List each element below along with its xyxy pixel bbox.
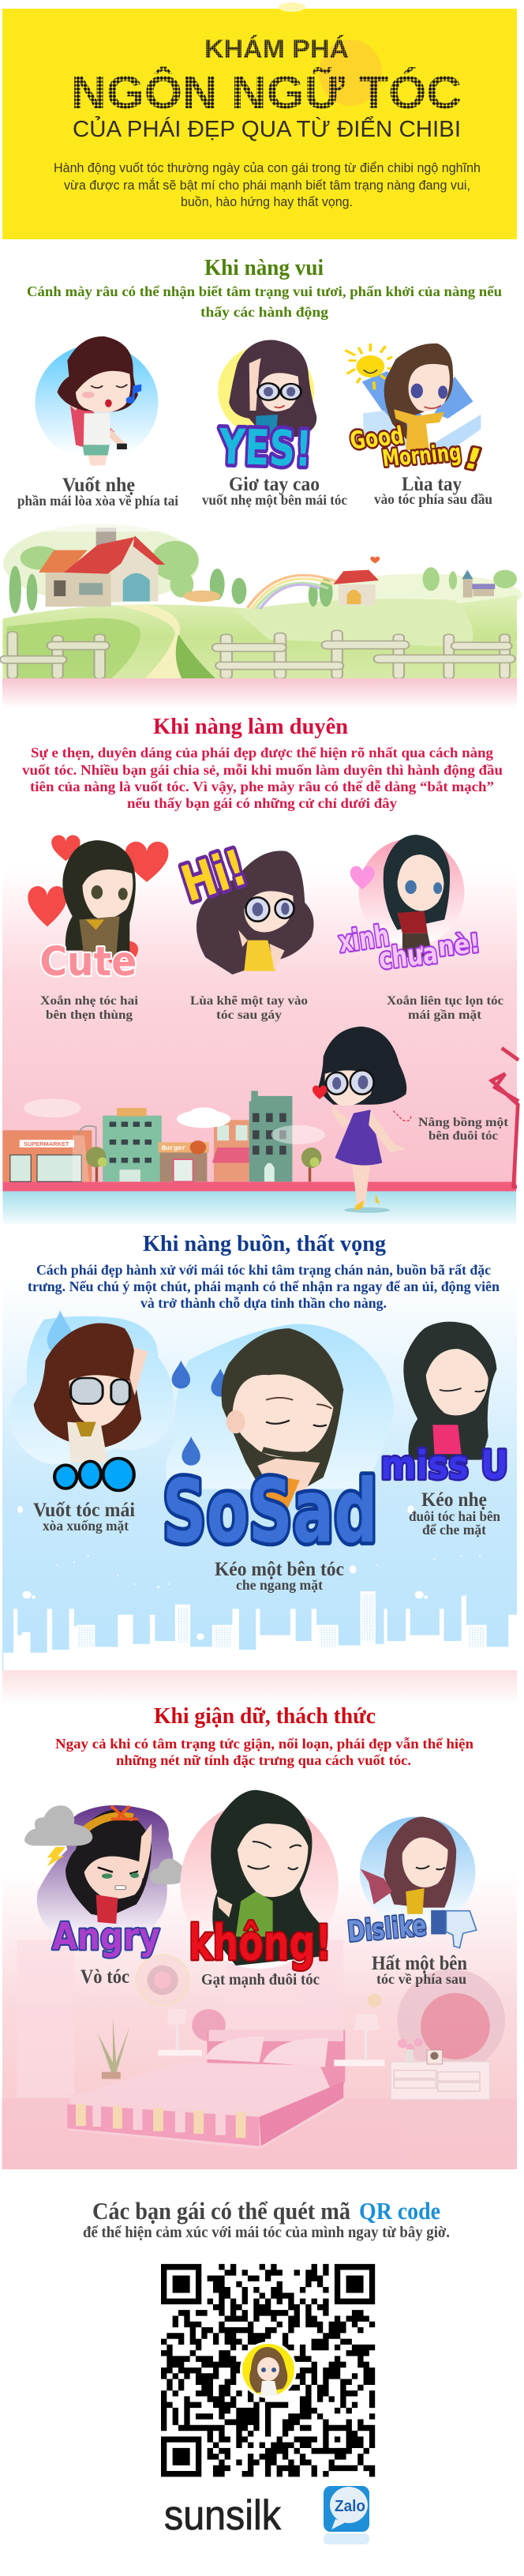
sticker: xinh chua ne: chưa [377, 936, 440, 976]
panel: qr footer [83, 2197, 450, 2544]
caption: lua tay: Lùa tay [402, 474, 462, 495]
character: dislike [346, 1817, 477, 1948]
captions: nang bong [418, 1116, 509, 1143]
caption: keo nhe [409, 1489, 500, 1538]
sticker: so sad: SoSad [163, 1461, 378, 1563]
character: lua tay [345, 344, 486, 477]
caption: vuot nhe: phần mái lòa xòa về phía tai [17, 493, 178, 509]
heading: khi nang buon: Khi nàng buồn, thất vọng [143, 1231, 386, 1256]
sticker: dots [54, 1459, 134, 1490]
intro text: khi gian du: những nét nữ tính đặc trưng qua cách vuốt tóc. [116, 1752, 411, 1768]
logo: zalo [324, 2486, 369, 2544]
caption: keo nhe: đuôi tóc hai bên [409, 1508, 500, 1524]
caption: vuot toc mai [33, 1500, 135, 1534]
captions: xinh: mái gần mặt [408, 1008, 482, 1022]
title: ngon ngu toc: NGÔN NGỮ TÓC [71, 67, 462, 118]
heading: khi nang vui: Khi nàng vui [204, 255, 324, 280]
intro text: khi nang vui [27, 284, 502, 320]
heading: khi gian du: Khi giận dữ, thách thức [154, 1703, 376, 1729]
sticker: xinh chua ne: nè! [436, 928, 481, 963]
subtitle: CỦA PHÁI ĐẸP QUA TỪ ĐIỂN CHIBI [73, 115, 461, 142]
illustration: city street: Burger [162, 1144, 186, 1152]
intro text: khi nang lam duyen [22, 745, 503, 811]
icon: thumbs down [431, 1910, 477, 1948]
caption: gio tay cao [202, 474, 347, 508]
captions: cute: bên thẹn thùng [46, 1008, 133, 1022]
character: keo nhe [380, 1322, 508, 1489]
character: nang bong [313, 1027, 411, 1213]
panel: khi nang lam duyen [2, 678, 518, 1229]
caption: keo mot ben toc: Kéo một bên tóc [215, 1559, 344, 1580]
caption: keo nhe: Kéo nhẹ [421, 1489, 487, 1511]
intro text: khi gian du: Ngay cả khi có tâm trạng tức giận, nổi loạn, phái đẹp vẫn thể hiện [55, 1736, 473, 1752]
caption: vuot toc mai: xòa xuống mặt [43, 1518, 129, 1534]
sticker: good morning: Good [348, 422, 406, 455]
caption: hat mot ben [372, 1953, 467, 1987]
captions: nang bong: Nâng bồng một [418, 1116, 509, 1129]
panel: yellow header [2, 2, 517, 239]
subheading: scan qr: để thể hiện cảm xúc với mái tóc của mình ngay từ bây giờ. [83, 2224, 450, 2241]
captions: cute [40, 994, 139, 1022]
sticker: good morning: ! [459, 441, 486, 477]
character: keo mot ben toc [163, 1328, 378, 1563]
illustration: city street: SUPERMARKET [24, 1142, 69, 1147]
captions: cute: Xoắn nhẹ tóc hai [40, 994, 139, 1008]
sticker: cute: Cute [39, 937, 137, 985]
caption: keo mot ben toc: che ngang mặt [236, 1577, 323, 1593]
caption: hat mot ben: tóc về phía sau [376, 1971, 466, 1987]
icon: qr avatar [240, 2341, 297, 2398]
character: vuot toc mai [34, 1310, 148, 1490]
caption: vuot nhe [17, 475, 178, 509]
intro paragraph: Hành động vuốt tóc thường ngày của con gái trong từ điển chibi ngộ nghĩnh [54, 161, 481, 175]
panel: khi nang vui [0, 255, 524, 678]
sticker: yes: YES! [217, 418, 313, 478]
caption: gat manh duoi toc: Gạt mạnh đuôi tóc [201, 1971, 320, 1988]
sticker: good morning [348, 422, 486, 477]
caption: vuot toc mai: Vuốt tóc mái [33, 1500, 135, 1521]
illustration: countryside landscape [0, 516, 524, 678]
sticker: xinh chua ne [337, 918, 481, 976]
character: angry [24, 1805, 187, 1958]
background clouds [9, 1316, 394, 1489]
sticker: khong: không! [189, 1915, 331, 1971]
character: hi [174, 838, 314, 974]
logo: zalo: Zalo [335, 2498, 365, 2515]
qr code [161, 2267, 375, 2474]
heading: khi nang lam duyen: Khi nàng làm duyên [153, 714, 348, 739]
illustration: white city skyline [3, 1505, 517, 1670]
intro text: khi nang lam duyen: vuốt tóc. Nhiều bạn gái chia sẻ, mỗi khi muốn làm duyên thì hành động đầu [22, 762, 503, 778]
intro text: khi nang vui: thấy các hành động [200, 304, 328, 320]
intro paragraph [54, 161, 481, 209]
logo: sunsilk: sunsilk [164, 2492, 281, 2539]
caption: hat mot ben: Hất một bên [372, 1953, 467, 1974]
sticker: angry: Angry [52, 1916, 160, 1958]
intro text: khi gian du [55, 1736, 473, 1768]
caption: gio tay cao: Giơ tay cao [229, 474, 320, 495]
captions: hi [190, 994, 308, 1022]
intro text: khi nang vui: Cánh mày râu có thể nhận biết tâm trạng vui tươi, phấn khởi của nàng nếu [27, 284, 502, 299]
intro text: khi nang lam duyen: nếu thấy bạn gái có những cử chỉ dưới đây [127, 795, 397, 811]
arrow: hair [393, 1111, 411, 1121]
character: vuot nhe [35, 336, 159, 465]
character: cute [28, 836, 168, 985]
panel: khi gian du [2, 1670, 517, 2169]
caption: lua tay: vào tóc phía sau đầu [374, 491, 492, 507]
intro text: khi nang buon: trưng. Nếu chú ý một chút, phái mạnh có thể nhận ra ngay để an ủi, động viên [28, 1279, 500, 1294]
sticker: hi: Hi! [174, 838, 253, 914]
character: xinh chua ne [337, 835, 481, 976]
heading: scan qr: QR code [359, 2197, 440, 2225]
intro text: khi nang buon: và trở thành chỗ dựa tinh thần cho nàng. [140, 1295, 387, 1311]
sticker: xinh chua ne: xinh [337, 918, 391, 959]
caption: lua tay [374, 474, 492, 507]
captions: hi: tóc sau gáy [216, 1008, 282, 1022]
intro text: khi nang lam duyen: tiên của nàng là vuốt tóc. Vì vậy, phe mày râu có thể dễ dàng “bắt mạch” [30, 779, 494, 794]
captions: xinh: Xoắn liên tục lọn tóc [387, 994, 503, 1008]
intro paragraph: buồn, hào hứng hay thất vọng. [181, 195, 353, 209]
panel: khi nang buon [2, 1224, 517, 1670]
illustration: pink bedroom [2, 1940, 517, 2169]
intro paragraph: vừa được ra mắt sẽ bật mí cho phái mạnh biết tâm trạng nàng đang vui, [64, 178, 470, 193]
sticker: good morning: Morning [380, 439, 463, 472]
intro text: khi nang buon: Cách phái đẹp hành xử với mái tóc khi tâm trạng chán nản, buồn bã rất đặc [36, 1262, 491, 1278]
illustration: city street [2, 1048, 518, 1229]
title: kham pha: KHÁM PHÁ [204, 35, 349, 63]
caption: vo toc: Vò tóc [80, 1966, 129, 1988]
character: khong [180, 1790, 339, 1971]
caption: keo mot ben toc [215, 1559, 344, 1593]
intro text: khi nang buon [28, 1262, 500, 1311]
caption: gio tay cao: vuốt nhẹ một bên mái tóc [202, 492, 347, 508]
character: gio tay cao [217, 340, 316, 478]
intro text: khi nang lam duyen: Sự e thẹn, duyên dáng của phái đẹp được thể hiện rõ nhất qua cách nàng [31, 745, 493, 760]
sticker: dislike: Dislike [346, 1909, 428, 1948]
heading: scan qr: Các bạn gái có thể quét mã [92, 2197, 350, 2225]
captions: xinh [387, 994, 503, 1022]
caption: vuot nhe: Vuốt nhẹ [62, 475, 135, 496]
captions: nang bong: bên đuôi tóc [429, 1129, 498, 1143]
captions: hi: Lùa khẽ một tay vào [190, 994, 308, 1008]
caption: keo nhe: để che mặt [422, 1522, 486, 1538]
